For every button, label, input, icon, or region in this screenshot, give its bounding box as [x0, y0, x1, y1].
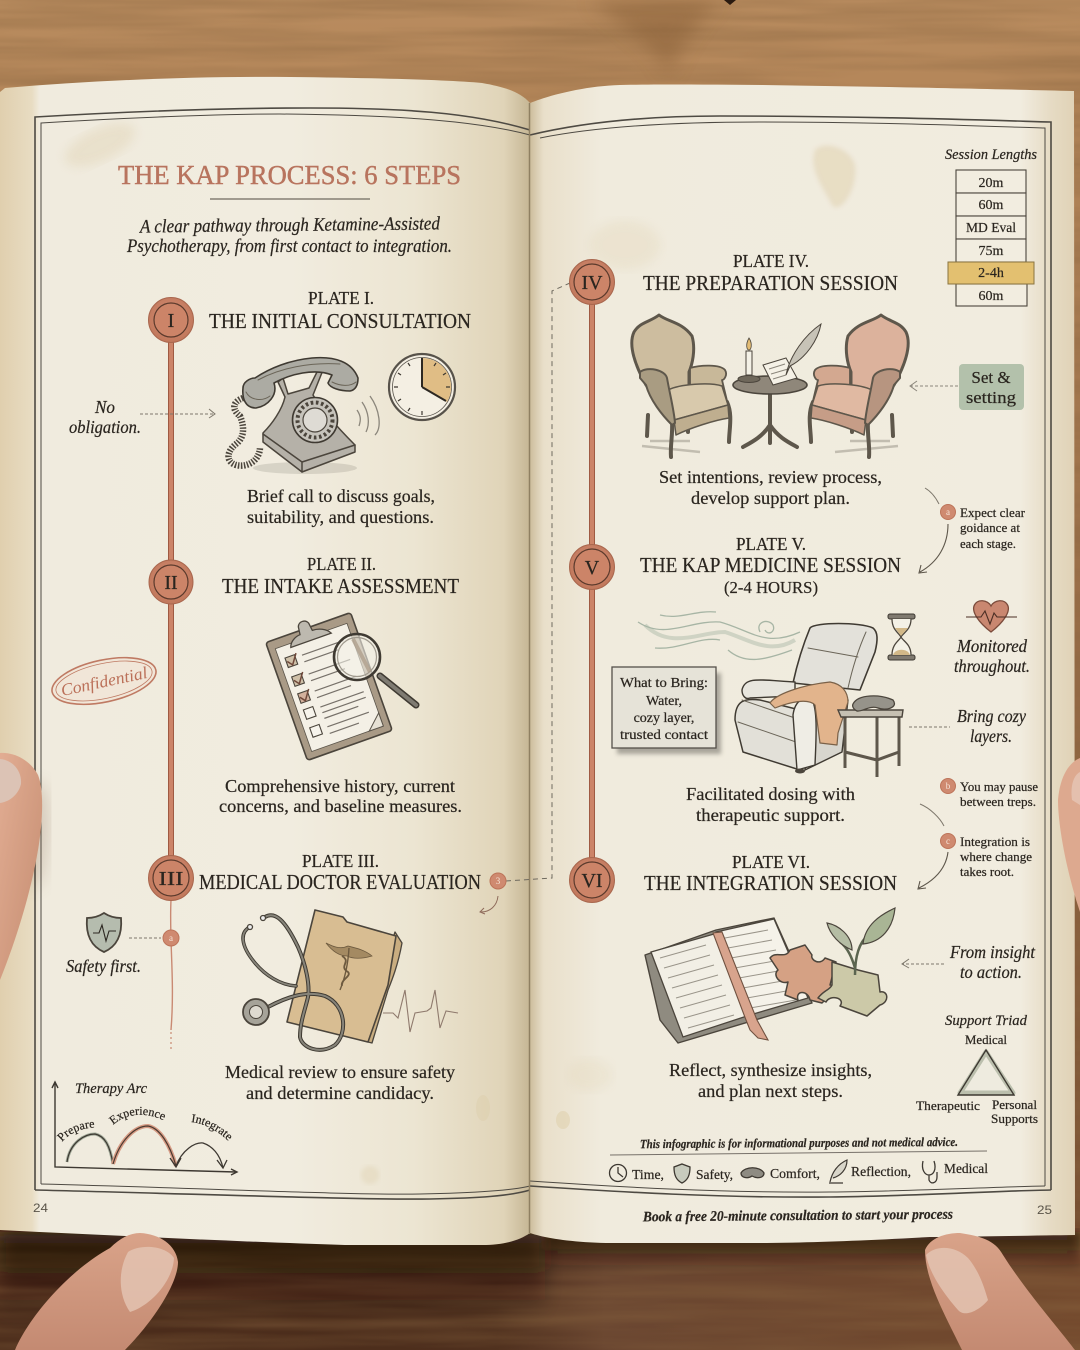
ringing arcs	[357, 396, 379, 435]
page number 25: 25	[1037, 1203, 1052, 1217]
heading: Plate I: PLATE I.	[308, 288, 374, 308]
note a: expect clear guidance: each stage.	[960, 537, 1016, 551]
letter	[763, 358, 797, 385]
decorative frame left	[35, 108, 530, 1199]
legend: icons: Medical	[944, 1162, 988, 1177]
back	[793, 624, 877, 690]
chart: therapy arc: Integrate	[191, 1114, 232, 1140]
legend: icons	[610, 1160, 988, 1183]
heading: Plate III	[199, 851, 481, 894]
handset	[243, 358, 358, 408]
dashed connector from Plate III to Plate IV	[506, 283, 570, 881]
book cover	[645, 918, 812, 1043]
left armchair	[632, 315, 730, 457]
table: session lengths: 60m	[979, 198, 1004, 213]
floor hatching	[642, 441, 898, 452]
seal V: V	[585, 557, 600, 579]
panel: left page	[0, 77, 530, 1245]
seal VI: VI	[581, 870, 603, 892]
note a: expect clear guidance: a	[946, 507, 950, 517]
puzzle sage	[818, 962, 887, 1016]
table: session lengths: Session Lengths	[945, 147, 1037, 163]
legend: icons: Time,	[632, 1168, 664, 1183]
page number 24: 24	[33, 1201, 48, 1215]
quill	[786, 324, 821, 375]
table: session lengths	[945, 147, 1037, 306]
table: session lengths: 75m	[979, 244, 1004, 259]
right timeline	[589, 300, 595, 860]
note b: you may pause	[920, 778, 1038, 826]
note badge: plate III with return arrow: 3	[496, 876, 501, 886]
text: plate II description: concerns, and baseline measures.	[219, 796, 462, 816]
subtitle: Psychotherapy, from first contact to integration.	[126, 236, 452, 257]
chart: therapy arc: Experience	[108, 1106, 165, 1125]
table: session lengths: 60m	[979, 289, 1004, 304]
text: plate II description	[219, 776, 462, 816]
note b: you may pause: You may pause	[960, 780, 1038, 794]
text: plate III description: and determine candidacy.	[246, 1083, 434, 1103]
left hand finger	[0, 753, 47, 980]
heading: Plate VI: THE INTEGRATION SESSION	[644, 871, 897, 895]
table: session lengths: 20m	[979, 176, 1004, 191]
eye mask	[853, 696, 894, 711]
icon: folder and stethoscope	[243, 910, 458, 1050]
far arm	[742, 680, 795, 698]
body	[735, 699, 800, 770]
icon: mist swirl	[638, 612, 800, 659]
callout box: what to bring: trusted contact	[620, 728, 708, 743]
callout box: what to bring: What to Bring:	[620, 676, 708, 691]
bottom right thumb	[925, 1233, 1075, 1350]
disclaimer: This infographic is for informational purposes and not medical advice.	[640, 1135, 958, 1151]
magnifier	[380, 676, 416, 705]
heading: Plate V	[640, 534, 901, 597]
heading: Plate I: THE INITIAL CONSULTATION	[209, 309, 471, 333]
folder back	[360, 932, 402, 1043]
heading: Plate I	[209, 288, 471, 333]
clock icon	[610, 1164, 626, 1182]
text: plate I description	[247, 486, 435, 527]
caduceus	[326, 943, 372, 958]
icon: heart with pulse	[966, 601, 1017, 632]
diagram: support triad: Therapeutic	[916, 1099, 980, 1113]
callout box: what to bring: cozy layer,	[634, 711, 694, 726]
text: plate V description	[686, 784, 855, 825]
note b: you may pause: b	[946, 781, 951, 791]
coiled cord	[228, 398, 260, 466]
heading: Plate IV: PLATE IV.	[733, 251, 809, 271]
candle	[746, 351, 752, 375]
text: plate IV description: Set intentions, review process,	[659, 467, 882, 487]
chart: therapy arc	[51, 1080, 238, 1176]
heading: Plate VI	[644, 852, 897, 895]
text: plate IV description: develop support plan.	[691, 488, 850, 508]
quill icon	[829, 1160, 847, 1183]
heading: Plate V: PLATE V.	[736, 534, 806, 554]
diagram: support triad: Personal	[992, 1098, 1038, 1112]
diagram: support triad: Supports	[991, 1112, 1038, 1126]
text: plate VI description: Reflect, synthesize insights,	[669, 1060, 872, 1080]
bottom left thumb	[15, 1233, 178, 1350]
callout: set and setting: setting	[966, 388, 1017, 407]
icon: hourglass	[888, 614, 915, 660]
table	[743, 393, 797, 447]
chart: therapy arc: Prepare	[56, 1122, 94, 1142]
heartbeat trace	[383, 990, 458, 1032]
sprout	[840, 935, 868, 975]
seal IV	[570, 260, 614, 304]
seal I: I	[168, 310, 174, 332]
icon: rotary telephone	[228, 358, 379, 474]
clip	[284, 614, 331, 648]
right armchair	[810, 315, 908, 457]
note c: integration: where change	[960, 850, 1032, 864]
stamp: confidential	[48, 649, 160, 713]
near arm	[793, 698, 816, 770]
table: session lengths: 2-4h	[978, 266, 1004, 281]
legend: icons: Safety,	[696, 1168, 733, 1183]
diagram: support triad: Support Triad	[945, 1013, 1027, 1029]
callout box: what to bring: Water,	[646, 694, 682, 709]
blanket	[770, 682, 848, 745]
note c: integration: takes root.	[960, 865, 1014, 879]
heading: Plate II	[222, 554, 459, 598]
text: plate II description: Comprehensive history, current	[225, 776, 455, 796]
decorative frame right	[530, 116, 1051, 1197]
icon: recliner with blanket and side table	[735, 624, 903, 777]
callout: monitored throughout	[954, 636, 1030, 676]
callout box: what to bring	[612, 667, 721, 754]
callout: safety first	[66, 930, 179, 976]
stethoscope icon	[922, 1161, 937, 1183]
table: session lengths: MD Eval	[966, 221, 1016, 236]
note a: expect clear guidance: goidance at	[960, 521, 1021, 535]
near side panel	[805, 700, 848, 770]
callout: safety first: Safety first.	[66, 956, 141, 976]
callout: monitored throughout: Monitored	[956, 636, 1027, 656]
callout: bring cozy layers: layers.	[970, 726, 1012, 746]
note a: expect clear guidance	[919, 488, 1026, 573]
subtitle: A clear pathway through Ketamine-Assisted	[138, 213, 440, 238]
side table	[845, 716, 899, 777]
text: plate V description: therapeutic support.	[696, 805, 845, 825]
text: plate VI description: and plan next steps.	[698, 1081, 843, 1101]
seal I	[148, 298, 194, 342]
shield icon	[674, 1164, 690, 1183]
legend rule	[610, 1151, 987, 1155]
title: THE KAP PROCESS: 6 STEPS	[118, 160, 461, 190]
callout: from insight to action: From insight	[949, 942, 1036, 962]
callout: no obligation	[69, 397, 215, 437]
seal II	[149, 560, 193, 604]
callout: monitored throughout: throughout.	[954, 656, 1030, 676]
note badge: plate III with return arrow	[480, 873, 506, 914]
diagram: support triad	[916, 1013, 1038, 1126]
panel: right page	[530, 85, 1075, 1243]
heading: Plate V: THE KAP MEDICINE SESSION	[640, 553, 901, 577]
callout: from insight to action	[902, 942, 1036, 982]
heading: Plate III: PLATE III.	[302, 851, 379, 871]
icon: open book with puzzle and sprout	[645, 908, 895, 1043]
heading: Plate V: (2-4 HOURS)	[724, 578, 818, 597]
icon: safety shield	[87, 913, 121, 952]
callout: set and setting	[910, 364, 1024, 410]
callout: bring cozy layers	[909, 706, 1026, 746]
stethoscope	[243, 915, 343, 1050]
seal III: III	[158, 868, 184, 890]
icon: clipboard and magnifier	[263, 605, 416, 760]
stains	[556, 146, 855, 1129]
water stains	[59, 114, 490, 1184]
chart: therapy arc: Therapy Arc	[75, 1081, 147, 1097]
callout: no obligation: obligation.	[69, 417, 141, 437]
icon: clock	[389, 354, 455, 420]
highlighted row	[948, 262, 1034, 284]
ribbon bookmark	[713, 932, 768, 1040]
callout: no obligation: No	[94, 397, 115, 417]
heading: Plate VI: PLATE VI.	[732, 852, 810, 872]
text: plate III description	[225, 1062, 455, 1103]
checklist	[285, 655, 322, 737]
title rule	[210, 198, 370, 200]
callout: bring cozy layers: Bring cozy	[957, 706, 1026, 726]
callout: safety first: a	[169, 933, 173, 943]
subtitle	[126, 213, 452, 257]
puzzle terracotta	[770, 945, 836, 1003]
note a: expect clear guidance: Expect clear	[960, 506, 1026, 520]
seal III	[148, 856, 194, 900]
heading: Plate II: PLATE II.	[307, 554, 376, 574]
callout: set and setting: Set &	[971, 368, 1011, 387]
text: plate V description: Facilitated dosing with	[686, 784, 855, 804]
icon: two armchairs and table	[632, 315, 908, 457]
heading: Plate III: MEDICAL DOCTOR EVALUATION	[199, 870, 481, 894]
note c: integration: c	[946, 836, 950, 846]
left timeline	[171, 340, 172, 1050]
note c: integration: Integration is	[960, 835, 1030, 849]
heading: Plate IV	[643, 251, 898, 295]
seal IV: IV	[581, 272, 603, 294]
legend: icons: Reflection,	[851, 1165, 911, 1180]
note b: you may pause: between treps.	[960, 795, 1036, 809]
book gutter	[528, 103, 530, 1234]
text: plate I description: suitability, and questions.	[247, 507, 434, 527]
text: plate IV description	[659, 467, 882, 508]
text: plate VI description	[669, 1060, 872, 1101]
stamp: confidential: Confidential	[59, 663, 149, 700]
legend: icons: Comfort,	[770, 1167, 820, 1182]
seal II: II	[164, 572, 178, 594]
text: plate III description: Medical review to ensure safety	[225, 1062, 455, 1082]
heading: Plate II: THE INTAKE ASSESSMENT	[222, 574, 459, 598]
callout: from insight to action: to action.	[960, 962, 1022, 982]
text: plate I description: Brief call to discuss goals,	[247, 486, 435, 506]
mask icon	[741, 1168, 764, 1178]
dial	[292, 398, 338, 442]
right hand finger	[1058, 758, 1080, 912]
folder	[287, 910, 396, 1042]
phone base	[263, 370, 355, 472]
seal VI	[570, 858, 614, 902]
footer call to action: Book a free 20-minute consultation to start your process	[642, 1207, 953, 1225]
note c: integration	[918, 834, 1032, 889]
heading: Plate IV: THE PREPARATION SESSION	[643, 271, 898, 295]
diagram: support triad: Medical	[965, 1033, 1008, 1047]
seal V	[570, 544, 614, 590]
